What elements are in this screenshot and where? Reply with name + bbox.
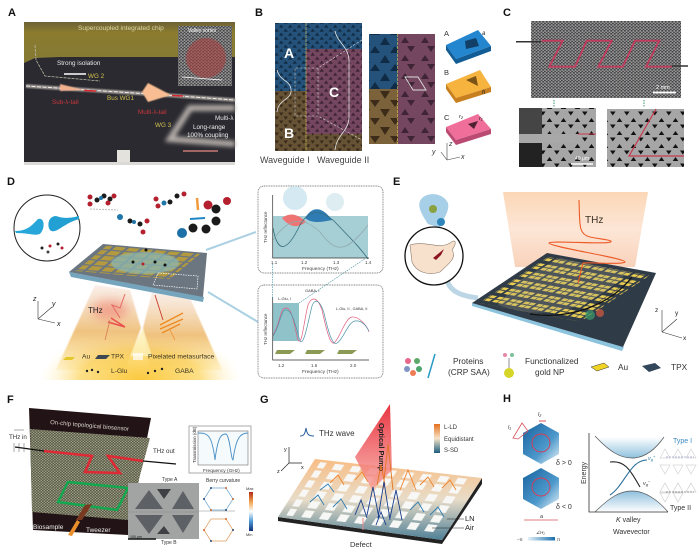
chip photo background xyxy=(24,22,235,165)
xyz axes E: x xyxy=(683,335,687,342)
chip labels xyxy=(52,25,234,139)
label F: F xyxy=(7,394,14,406)
Berry colorbar xyxy=(246,486,254,537)
Berry colorbar: Min xyxy=(246,532,252,537)
biosensor chip xyxy=(472,253,656,351)
lower THz reflectance plot: Frequency (THz) xyxy=(302,369,339,375)
upper THz reflectance plot: 1.3 xyxy=(333,260,340,265)
xyz axes D xyxy=(32,296,61,328)
inset circle: synapse xyxy=(14,195,80,261)
coupling arrow xyxy=(183,150,218,152)
lattice constant arrow xyxy=(524,514,558,520)
biosample and tweezer xyxy=(33,504,111,536)
legend D: GABA xyxy=(175,368,194,375)
waveguide 3 glow xyxy=(170,108,235,144)
transmission plot xyxy=(189,426,251,474)
unit cell A blue: A xyxy=(444,29,449,38)
label C: C xyxy=(503,7,511,19)
THz wave: THz xyxy=(88,306,103,315)
LN and Air labels: LN xyxy=(465,514,475,523)
unit cell B yellow xyxy=(444,68,491,103)
lower THz reflectance plot: 2.0 xyxy=(350,363,357,368)
color scale legend xyxy=(434,424,474,454)
bottom yellow glow xyxy=(40,280,240,380)
circle with finger xyxy=(405,227,463,285)
phase colorbar: ∠H₂ xyxy=(536,530,545,535)
xyz axes E: y xyxy=(675,310,679,317)
chip top view: 2 mm xyxy=(656,85,670,91)
band diagram: Wavevector xyxy=(613,529,650,536)
unit cell B yellow: h xyxy=(482,90,486,96)
upper THz reflectance plot xyxy=(258,186,383,273)
lower THz reflectance plot: L-Glu, I xyxy=(278,296,291,301)
unit cell B yellow: B xyxy=(444,68,449,77)
band diagram: Energy xyxy=(581,461,588,484)
waveguide 2 dashed xyxy=(35,45,100,81)
phase colorbar: π xyxy=(557,537,560,542)
phase colorbar: −π xyxy=(517,537,523,542)
SEM inset type A B xyxy=(128,477,199,546)
xyz axes: x xyxy=(460,154,465,161)
unit cell A blue: a xyxy=(482,31,486,37)
chip labels: Long-range xyxy=(193,124,226,131)
legend E: (CRP SAA) xyxy=(448,367,490,377)
band diagram xyxy=(581,433,668,536)
chip labels: 100% coupling xyxy=(187,132,229,139)
panel B: waveguide lattice and unit cells xyxy=(255,7,491,165)
optical pump beam xyxy=(355,404,392,490)
xyz axes D: x xyxy=(56,321,61,328)
SEM inset left: 40 μm xyxy=(575,156,589,162)
THz wave xyxy=(88,294,183,340)
chip labels: Multi-λ-tail xyxy=(138,109,167,116)
lower THz reflectance plot: L-Glu, II , GABA, II xyxy=(336,307,367,311)
chip labels: Multi-λ xyxy=(215,115,234,122)
legend E: Functionalized xyxy=(525,356,579,366)
hexagon delta positive: l₂ xyxy=(538,412,542,418)
band diagram: + xyxy=(653,454,656,459)
large molecule with arrows xyxy=(177,197,231,238)
lower THz reflectance plot: 1.2 xyxy=(278,363,285,368)
chip labels: WG 3 xyxy=(155,122,172,129)
THz in out labels xyxy=(9,430,175,455)
lower THz reflectance plot: 1.6 xyxy=(311,363,318,368)
hexagon delta negative xyxy=(523,468,572,511)
LN and Air labels: Air xyxy=(465,523,475,532)
THz beam xyxy=(503,192,648,267)
biosample and tweezer: Biosample xyxy=(33,524,64,531)
LN plate xyxy=(278,459,482,544)
legend D: Pixelated metasurface xyxy=(148,354,214,360)
panel E: wearable THz immunoassay xyxy=(393,176,688,378)
biosample and tweezer: Tweezer xyxy=(86,527,111,534)
Berry curvature: Berry curvature xyxy=(206,478,240,484)
large lattice domain map: A xyxy=(284,45,294,61)
transmission plot: Transmission (dB) xyxy=(192,426,197,463)
panel G: defect cavity with optical pump xyxy=(260,394,482,549)
band diagram: K valley xyxy=(616,517,641,524)
THz wave legend xyxy=(300,428,355,438)
upper THz reflectance plot: 1.4 xyxy=(365,260,372,265)
THz label: THz xyxy=(585,215,603,226)
xyz axes G: x xyxy=(301,465,304,471)
panel D: pixelated metasurface sensing xyxy=(7,176,258,380)
type I and II lattices: Type I xyxy=(673,438,692,445)
type I and II lattices: Type II xyxy=(670,505,691,512)
xyz axes D: y xyxy=(51,301,56,308)
unit cell C pink xyxy=(444,113,491,145)
xyz axes D: z xyxy=(32,296,37,303)
defect label: Defect xyxy=(350,540,373,549)
large lattice domain map: C xyxy=(329,84,339,100)
Berry curvature xyxy=(199,478,240,542)
lower THz reflectance plot xyxy=(258,285,383,378)
THz beams xyxy=(56,285,222,370)
waveguide captions: Waveguide I xyxy=(260,155,310,165)
legend E: Au xyxy=(618,362,629,372)
xyz axes: y xyxy=(431,149,436,156)
biosensor chip xyxy=(15,408,176,535)
xyz axes G: z xyxy=(277,469,280,475)
bus waveguide 1 glow xyxy=(26,83,235,102)
unit cell C pink: r₁ xyxy=(479,116,483,122)
xyz axes E xyxy=(655,307,687,342)
LN and Air labels xyxy=(432,514,475,532)
unit cell C pink: r₂ xyxy=(459,114,464,120)
panel D plots xyxy=(258,186,383,378)
panel C: meander waveguide chip and SEM insets xyxy=(503,7,688,167)
defect label xyxy=(350,518,373,549)
green pointers xyxy=(554,100,644,107)
bubble with proteins xyxy=(419,194,448,228)
unit cell A blue xyxy=(444,29,491,64)
upper THz reflectance plot: 1.2 xyxy=(301,260,308,265)
panel A: supercoupled integrated chip photo xyxy=(8,7,235,165)
inset: valley vortex xyxy=(178,26,232,86)
xyz axes G xyxy=(277,447,304,475)
unit cell C pink: C xyxy=(444,113,450,122)
xyz axes xyxy=(431,141,465,161)
chip labels: Strong isolation xyxy=(57,60,101,67)
zoomed lattice xyxy=(369,34,435,144)
chip labels: WG 2 xyxy=(88,73,105,80)
label E: E xyxy=(393,176,400,188)
band diagram: v xyxy=(643,481,646,487)
label D: D xyxy=(7,176,15,188)
Berry colorbar: Max xyxy=(246,486,254,491)
THz in out labels: THz in xyxy=(9,434,27,441)
label A: A xyxy=(8,7,16,19)
color scale legend: Equidistant xyxy=(444,437,474,443)
large lattice domain map: B xyxy=(284,125,294,141)
hexagon delta positive: δ > 0 xyxy=(556,460,572,467)
biosensor chip: On-chip topological biosensor xyxy=(50,420,129,433)
phase colorbar xyxy=(517,530,560,542)
THz pulse xyxy=(549,200,625,283)
legend D: L-Glu xyxy=(111,368,128,375)
field peaks xyxy=(310,444,456,525)
waveguide II caption: Waveguide II xyxy=(317,155,369,165)
band diagram: g xyxy=(651,457,654,462)
color scale legend: S-SD xyxy=(444,448,459,454)
chip labels: Sub-λ-tail xyxy=(52,99,79,106)
molecules xyxy=(88,192,186,234)
SEM inset type A B: Type A xyxy=(162,477,178,483)
metasurface chip xyxy=(69,244,207,302)
SEM inset left xyxy=(519,108,596,167)
hexagon delta negative: δ < 0 xyxy=(556,504,572,511)
SEM inset type A B: Type B xyxy=(161,540,177,546)
SEM inset type A B: 100 μm xyxy=(130,535,142,539)
hexagon delta positive xyxy=(508,412,572,467)
upper THz reflectance plot: Frequency (THz) xyxy=(302,266,339,272)
SEM inset right xyxy=(607,109,684,167)
upper THz reflectance plot: THz reflectance xyxy=(263,211,268,243)
band diagram: v xyxy=(648,456,651,462)
large lattice domain map xyxy=(275,23,362,151)
band diagram: g xyxy=(646,482,649,487)
THz in out labels: THz out xyxy=(153,448,175,455)
band diagram: − xyxy=(648,479,651,484)
legend D: TPX xyxy=(111,354,125,360)
transmission plot: Frequency (GHz) xyxy=(203,468,240,474)
dashed links between plots xyxy=(272,258,366,303)
label B: B xyxy=(255,7,263,19)
upper THz reflectance plot: 1.1 xyxy=(271,260,278,265)
label H: H xyxy=(503,393,511,405)
legend D xyxy=(63,353,214,375)
connector lines from chip to plots xyxy=(206,232,258,322)
chip labels: Supercoupled integrated chip xyxy=(78,25,164,32)
xyz axes: z xyxy=(448,141,453,148)
hexagon delta positive: l₁ xyxy=(508,425,511,431)
panel F: on-chip topological biosensor xyxy=(7,394,254,546)
chip labels: Bus WG1 xyxy=(107,95,134,102)
ribbon to chip xyxy=(447,280,478,298)
isolation arrow xyxy=(64,73,86,75)
xyz axes E: z xyxy=(655,307,658,314)
lower THz reflectance plot: GABA, I xyxy=(305,288,319,293)
panel H: valley band structure xyxy=(503,393,696,542)
legend D: Au xyxy=(82,354,90,360)
legend E: Proteins xyxy=(453,356,483,366)
legend E xyxy=(404,353,688,378)
color scale legend: L-LD xyxy=(444,425,458,431)
THz wave legend: THz wave xyxy=(319,429,355,438)
optical pump label: Optical Pump xyxy=(377,423,386,472)
xyz axes G: y xyxy=(284,447,287,453)
legend E: TPX xyxy=(671,362,688,372)
legend E: gold NP xyxy=(535,367,565,377)
lattice constant arrow: a xyxy=(540,514,543,520)
inset: valley vortex: Valley vortex xyxy=(188,28,217,34)
lower THz reflectance plot: THz reflectance xyxy=(263,313,268,345)
label G: G xyxy=(260,394,269,406)
type I and II lattices xyxy=(660,438,696,512)
chip top view xyxy=(516,21,688,98)
